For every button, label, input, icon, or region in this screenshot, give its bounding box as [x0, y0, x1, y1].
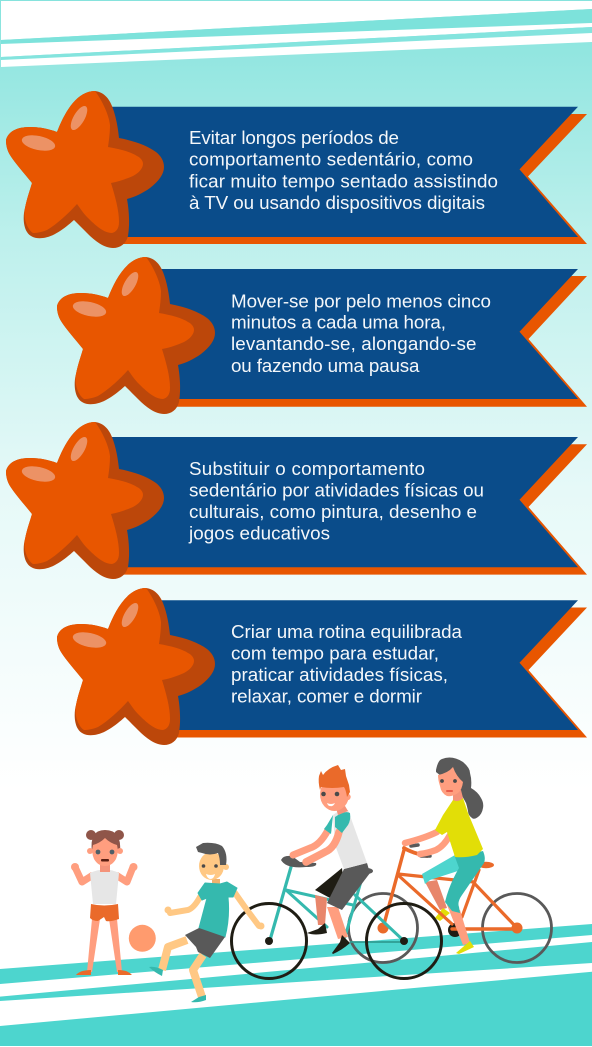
illustration: boy kicking ball	[149, 843, 264, 1002]
banner 3 text	[188, 458, 484, 544]
banner 1 text: à TV ou usando dispositivos digitais	[189, 192, 485, 213]
banner 2 text: ou fazendo uma pausa	[231, 355, 420, 376]
banner 3 text: sedentário por atividades físicas ou	[189, 480, 484, 501]
banner 4 text: relaxar, comer e dormir	[231, 686, 422, 706]
panel: banner 1	[100, 107, 587, 244]
icon: star 1	[6, 91, 164, 248]
banner 3 text: jogos educativos	[188, 522, 330, 544]
illustration: woman cyclist and orange bike	[378, 758, 522, 954]
panel: banner 2	[150, 269, 587, 407]
banner 1 text: Evitar longos períodos de	[189, 127, 399, 148]
banner 2 text	[231, 290, 491, 376]
illustration: grey wheels of orange bike	[348, 894, 552, 962]
banner 3 text: Substituir o comportamento	[189, 458, 425, 479]
icon: star 4	[57, 588, 215, 745]
banner 1 text	[189, 127, 498, 213]
banner 4 text: Criar uma rotina equilibrada	[231, 621, 463, 642]
illustration: boy cyclist and teal bike	[270, 765, 404, 954]
illustration: black bike wheels	[232, 904, 442, 978]
banner 2 text: Mover-se por pelo menos cinco	[231, 290, 491, 311]
panel: banner 4	[150, 600, 587, 738]
banner 2 text: levantando-se, alongando-se	[231, 333, 476, 354]
banner 2 text: minutos a cada uma hora,	[231, 312, 446, 332]
illustration: girl	[71, 830, 138, 975]
background gradient	[0, 0, 592, 790]
header stripes	[1, 1, 592, 67]
illustration: ball	[129, 925, 156, 952]
ground stripes	[0, 924, 592, 1046]
banner 1 text: ficar muito tempo sentado assistindo	[189, 170, 498, 191]
panel: banner 3	[100, 437, 587, 575]
banner 1 text: comportamento sedentário, como	[189, 149, 473, 170]
icon: star 3	[6, 422, 164, 579]
banner 4 text: praticar atividades físicas,	[231, 664, 448, 685]
banner 3 text: culturais, como pintura, desenho e	[189, 501, 477, 522]
banner 4 text	[231, 621, 463, 706]
icon: star 2	[57, 257, 215, 414]
banner 4 text: com tempo para estudar,	[231, 642, 439, 663]
